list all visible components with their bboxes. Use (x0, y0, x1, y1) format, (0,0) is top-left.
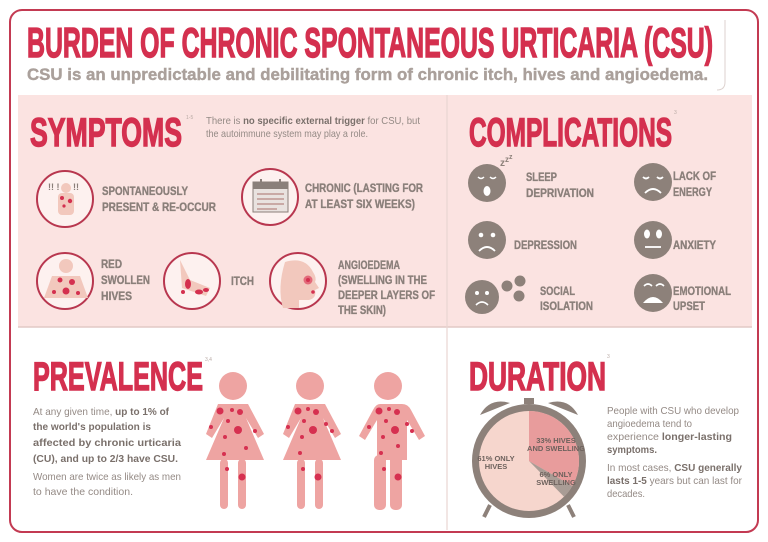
icon: angioedema face (270, 253, 326, 309)
label: emotional upset: EMOTIONAL (673, 284, 731, 298)
label: spontaneous: SPONTANEOUSLY (102, 184, 188, 198)
figure: woman 1 (206, 372, 264, 509)
heading: complications: 3 (674, 110, 677, 116)
label: spontaneous (102, 184, 216, 214)
chart: clock pie: SWELLING (536, 478, 576, 487)
panel: prevalence (33, 355, 425, 510)
text: symptoms intro: the autoimmune system may play a role. (206, 128, 368, 140)
text: symptoms intro: There is no specific external trigger for CSU, but (206, 115, 420, 127)
label: sleep: DEPRIVATION (526, 186, 594, 200)
text: duration description (607, 405, 742, 500)
label: itch: ITCH (231, 274, 254, 288)
label: angioedema: ANGIOEDEMA (338, 258, 400, 272)
text: prevalence description: At any given time, up to 1% of (33, 406, 169, 418)
label: social isolation (540, 284, 593, 313)
chart: clock pie: 61% ONLY (477, 454, 515, 463)
icon: itch (164, 253, 220, 309)
text: prevalence description: the world's population is (33, 421, 151, 433)
chart: clock pie: HIVES (485, 462, 507, 471)
label: angioedema: (SWELLING IN THE (338, 273, 427, 287)
label: chronic: CHRONIC (LASTING FOR (305, 181, 423, 195)
label: social isolation: SOCIAL (540, 284, 575, 298)
label: anxiety: ANXIETY (673, 238, 716, 252)
icon: spontaneous: !! ! (48, 182, 60, 192)
text: prevalence description: affected by chronic urticaria (33, 437, 181, 449)
text: prevalence description: to have the condition. (33, 486, 133, 498)
icon: sleep face: z (505, 155, 509, 164)
figure: man (359, 372, 425, 510)
icon: hives (37, 253, 93, 309)
heading: duration: 3 (607, 354, 610, 360)
icon: depression face (468, 221, 506, 259)
text: duration description: symptoms. (607, 444, 657, 456)
heading: symptoms: SYMPTOMS (30, 111, 182, 155)
chart: clock pie: 33% HIVES (536, 436, 576, 445)
heading: symptoms: 1-5 (186, 115, 193, 121)
header: subtitle: CSU is an unpredictable and debilitating form of chronic itch, hives and angioedema. (27, 65, 708, 84)
label: spontaneous: PRESENT & RE-OCCUR (102, 200, 216, 214)
panel: duration (469, 354, 742, 518)
label: emotional upset (673, 284, 731, 313)
icon: sleep face: z (509, 154, 513, 161)
label: lack of energy (673, 169, 716, 199)
label: angioedema: DEEPER LAYERS OF (338, 288, 435, 302)
label: chronic: AT LEAST SIX WEEKS) (305, 197, 415, 211)
label: emotional upset: UPSET (673, 299, 706, 313)
text: prevalence description: Women are twice as likely as men (33, 471, 181, 483)
label: hives: SWOLLEN (101, 273, 150, 287)
panel: symptoms & complications background (18, 95, 752, 530)
text: symptoms intro (206, 115, 420, 140)
label: sleep (526, 170, 594, 200)
label: chronic (305, 181, 423, 211)
label: social isolation: ISOLATION (540, 299, 593, 313)
figure: woman 2 (283, 372, 341, 509)
text: duration description: angioedema tend to (607, 418, 692, 430)
heading: prevalence (33, 355, 212, 399)
text: duration description: lasts 1-5 years but can last for (607, 475, 742, 487)
chart: clock pie: AND SWELLING (527, 444, 585, 453)
heading: duration: DURATION (469, 355, 606, 399)
heading: complications (469, 110, 677, 155)
label: sleep: SLEEP (526, 170, 557, 184)
label: hives (101, 257, 150, 303)
label: lack of energy: ENERGY (673, 185, 712, 199)
heading: prevalence: PREVALENCE (33, 355, 203, 399)
label: depression: DEPRESSION (514, 238, 577, 252)
icon: anxiety face (634, 221, 672, 259)
icon: lack of energy face (634, 163, 672, 201)
label: angioedema (338, 258, 435, 317)
text: duration description: decades. (607, 488, 645, 500)
panel: symptoms (30, 111, 435, 317)
text: prevalence description: (CU), and up to 2/3 have CSU. (33, 453, 178, 465)
icon: sleep face: z (500, 158, 505, 169)
heading: duration (469, 354, 610, 399)
chart: clock pie (472, 398, 586, 518)
icon: emotional upset face (634, 274, 672, 312)
label: hives: HIVES (101, 289, 132, 303)
icon: spontaneous: !! (73, 182, 79, 192)
icon: sleep face (468, 154, 513, 202)
icon: calendar (242, 169, 298, 225)
heading: prevalence: 3,4 (205, 357, 212, 363)
icon: social isolation faces (465, 276, 526, 314)
icon: spontaneous (37, 171, 93, 227)
text: duration description: People with CSU who develop (607, 405, 739, 417)
text: duration description: experience longer-lasting (607, 431, 732, 443)
label: lack of energy: LACK OF (673, 169, 716, 183)
text: prevalence description (33, 406, 181, 498)
label: hives: RED (101, 257, 122, 271)
panel: complications (465, 110, 731, 314)
label: angioedema: THE SKIN) (338, 303, 386, 317)
text: duration description: In most cases, CSU generally (607, 462, 742, 474)
chart: clock pie: 6% ONLY (539, 470, 573, 479)
